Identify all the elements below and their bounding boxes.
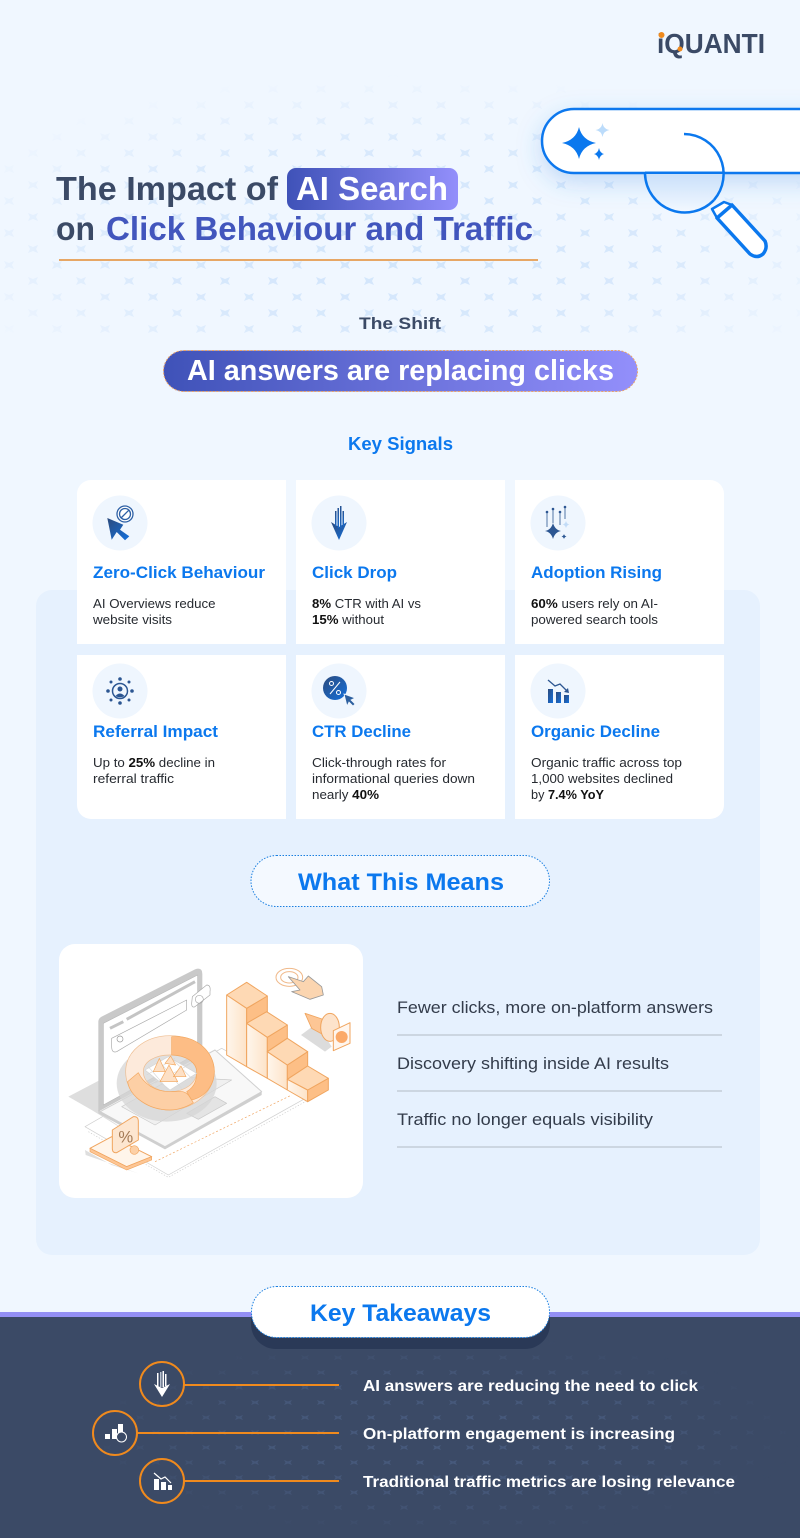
illustration: laptop with donut chart, bars and icons xyxy=(68,968,350,1177)
icon: sparkle with rising lines xyxy=(545,506,570,539)
icon: cursor with ban sign xyxy=(107,506,133,540)
panel: card adoption rising: Adoption Rising xyxy=(531,564,662,582)
panel: card referral impact: referral traffic xyxy=(93,771,175,786)
icon: percent with cursor xyxy=(323,676,355,706)
list item 3: Traffic no longer equals visibility xyxy=(397,1111,654,1129)
list item 1: Fewer clicks, more on-platform answers xyxy=(397,999,713,1017)
panel: card ctr decline xyxy=(296,655,505,819)
donut chart xyxy=(117,1036,217,1122)
panel: card referral impact: Referral Impact xyxy=(93,723,219,741)
panel: card click drop xyxy=(296,480,505,644)
panel: card zero-click behaviour: Zero-Click Behaviour xyxy=(93,564,266,582)
panel: card zero-click behaviour: website visits xyxy=(92,612,173,627)
icon: sparkles xyxy=(562,123,610,160)
AI Search highlight: AI Search xyxy=(296,170,448,207)
heading pill: Key Takeaways: Key Takeaways xyxy=(310,1300,491,1327)
panel: card organic decline xyxy=(515,655,724,819)
icon: declining bars xyxy=(154,1473,172,1490)
takeaway 2 xyxy=(93,1411,675,1455)
title: Click Behaviour and Traffic xyxy=(106,210,533,247)
icon: bars with globe xyxy=(105,1424,126,1442)
panel: card adoption rising: powered search tools xyxy=(531,612,659,627)
icon: search bar with magnifier xyxy=(542,109,800,256)
panel: card organic decline: 1,000 websites declined xyxy=(531,771,673,786)
panel: card zero-click behaviour: AI Overviews reduce xyxy=(93,596,216,611)
heading: Key Signals: Key Signals xyxy=(348,434,453,454)
panel: card click drop: Click Drop xyxy=(312,564,397,582)
heading pill: What This Means xyxy=(251,856,550,906)
panel: card click drop: 15% without xyxy=(312,612,384,627)
panel: card ctr decline: CTR Decline xyxy=(312,723,411,741)
panel: footer xyxy=(0,1312,800,1538)
takeaway 1 xyxy=(140,1362,698,1406)
icon: percent badge xyxy=(85,1117,152,1173)
banner: AI answers are replacing clicks xyxy=(164,350,638,392)
panel: card zero-click behaviour xyxy=(77,480,286,644)
panel: card click drop: 8% CTR with AI vs xyxy=(312,596,421,611)
panel: card organic decline: Organic Decline xyxy=(531,723,660,741)
takeaway 1: AI answers are reducing the need to click xyxy=(363,1378,698,1395)
icon: person with outward arrows xyxy=(106,677,134,705)
icon: megaphone xyxy=(301,1013,350,1052)
heading pill: Key Takeaways xyxy=(251,1286,550,1349)
list item 2: Discovery shifting inside AI results xyxy=(397,1055,669,1073)
panel: card organic decline: Organic traffic across top xyxy=(531,755,682,770)
icon: falling arrow xyxy=(154,1371,170,1397)
panel: card ctr decline: nearly 40% xyxy=(312,787,379,802)
icon: pointing hand xyxy=(276,968,323,999)
takeaway 3: Traditional traffic metrics are losing relevance xyxy=(363,1474,735,1491)
panel: card adoption rising xyxy=(515,480,724,644)
list: what this means xyxy=(397,999,722,1148)
panel: card adoption rising: 60% users rely on AI- xyxy=(531,596,658,611)
panel: card ctr decline: Click-through rates for xyxy=(312,755,447,770)
title: on xyxy=(56,210,95,247)
takeaway 3 xyxy=(140,1459,735,1503)
panel: main background xyxy=(36,590,760,1255)
panel: illustration card xyxy=(59,944,363,1198)
icon: percent badge: % xyxy=(118,1128,133,1147)
platform xyxy=(85,1048,308,1177)
takeaway 2: On-platform engagement is increasing xyxy=(363,1426,675,1443)
panel: card organic decline: by 7.4% YoY xyxy=(531,787,604,802)
title: The Impact of xyxy=(56,170,279,207)
heading pill: What This Means: What This Means xyxy=(298,869,504,896)
icon: falling arrow xyxy=(331,506,347,540)
heading: The Shift: The Shift xyxy=(359,314,441,333)
icon: declining bars xyxy=(548,680,569,703)
panel: card ctr decline: informational queries down xyxy=(312,771,475,786)
panel: card referral impact xyxy=(77,655,286,819)
title xyxy=(56,168,533,247)
logo: iQUANTI: iQUANTI xyxy=(657,28,765,59)
panel: card referral impact: Up to 25% decline in xyxy=(93,755,215,770)
banner: AI answers are replacing clicks: AI answers are replacing clicks xyxy=(187,355,614,387)
bar steps xyxy=(227,982,328,1102)
laptop xyxy=(68,969,262,1149)
